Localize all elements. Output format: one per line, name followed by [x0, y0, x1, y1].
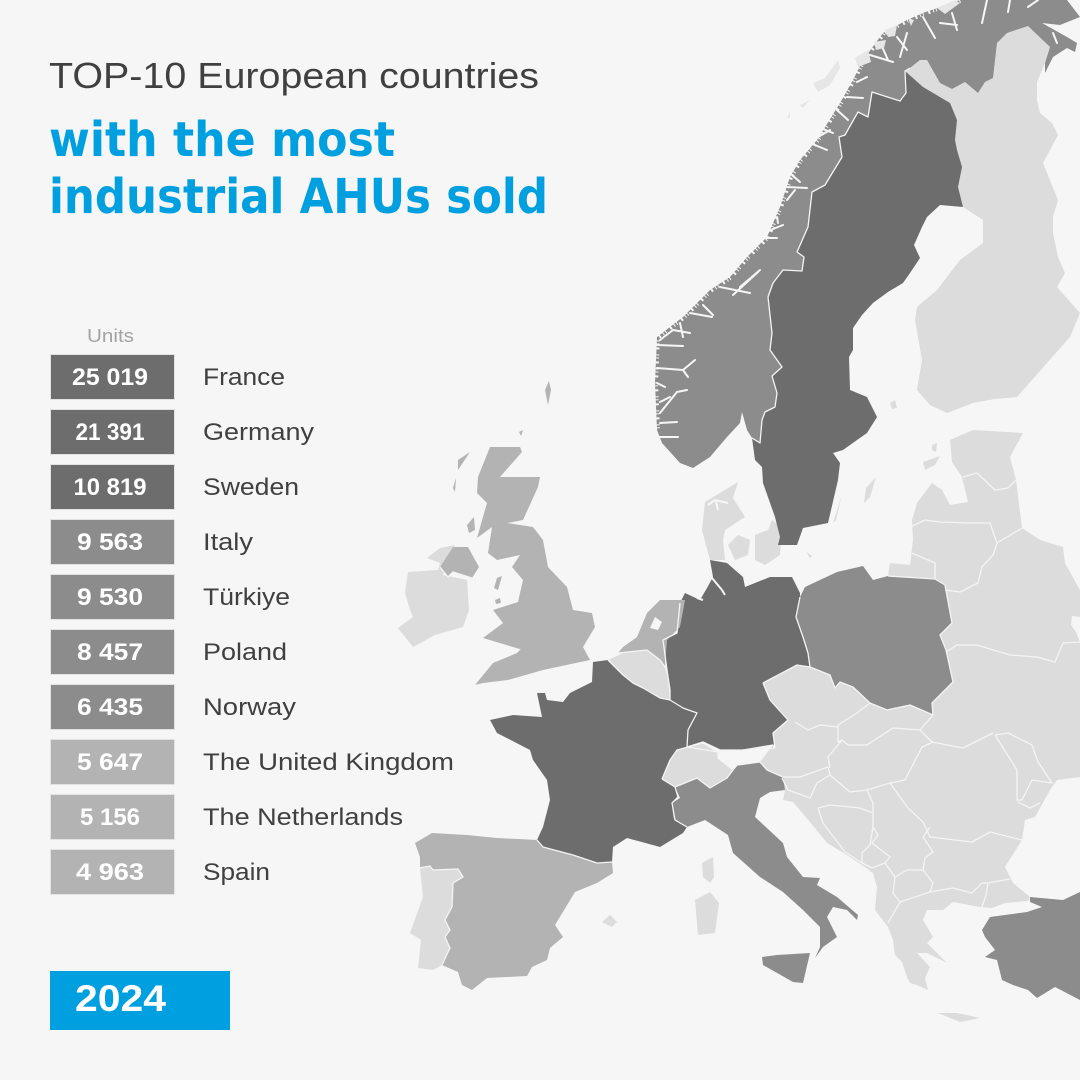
row: France: France [203, 364, 285, 391]
heading: industrial AHUs sold [49, 169, 548, 225]
Limfjord [708, 500, 728, 510]
row: The Netherlands: The Netherlands [203, 804, 403, 831]
country: Italy [672, 762, 858, 983]
land borders [420, 68, 1080, 965]
country: Switzerland [662, 743, 733, 788]
row: Italy: Italy [203, 529, 253, 556]
row: Sweden [50, 464, 299, 510]
country: Norway [655, 0, 1080, 468]
row: France [50, 354, 285, 400]
Balearic islands [602, 915, 617, 927]
country: eastern Europe, unranked [760, 430, 1080, 990]
row: Italy [50, 520, 253, 564]
row: Türkiye: 9 530 [77, 584, 143, 611]
row: Poland: Poland [203, 639, 287, 666]
row: Spain: 4 963 [76, 859, 144, 886]
row: Sweden: Sweden [203, 474, 299, 501]
country: Belgium [608, 650, 670, 700]
year badge: 2024 [75, 978, 166, 1019]
country: France [490, 660, 697, 863]
row: The United Kingdom: The United Kingdom [203, 749, 454, 776]
column label: Units: Units [87, 326, 134, 346]
row: The United Kingdom: 5 647 [77, 749, 143, 776]
ranking table [50, 354, 454, 894]
notch east of Belarus [1071, 616, 1080, 642]
row: Türkiye: Türkiye [203, 584, 290, 611]
row: Poland [50, 630, 287, 674]
heading: with the most [49, 112, 395, 168]
country: Poland [796, 566, 953, 715]
row: Norway [50, 684, 296, 730]
row: The United Kingdom [50, 740, 454, 784]
islands: Corsica, Sardinia and Crete [695, 857, 980, 1022]
country: the United Kingdom [440, 381, 595, 685]
Norwegian fjords [657, 0, 1057, 437]
row: Italy: 9 563 [77, 529, 143, 556]
country: Ireland [398, 545, 469, 647]
row: Norway: Norway [203, 694, 296, 721]
country: Sweden [752, 71, 963, 545]
row: Germany: 21 391 [76, 419, 144, 446]
row: Spain [50, 850, 270, 894]
country: Spain [415, 833, 613, 990]
country: Germany [663, 560, 810, 750]
heading [49, 112, 548, 225]
row: The Netherlands [50, 794, 403, 840]
row: Germany [50, 410, 314, 454]
Norwegian islands [787, 0, 960, 118]
row: France: 25 019 [72, 364, 148, 391]
country: Finland [905, 26, 1080, 413]
row: The Netherlands: 5 156 [80, 804, 140, 831]
row: Germany: Germany [203, 419, 314, 446]
country: Portugal [410, 866, 463, 970]
country: Denmark [702, 482, 782, 565]
title line: TOP-10 European countries [49, 55, 539, 96]
row: Türkiye [50, 574, 290, 620]
country: Turkey [982, 892, 1080, 1000]
year badge [50, 971, 230, 1030]
row: Spain: Spain [203, 859, 270, 886]
map of Europe [398, 0, 1080, 1022]
row: Sweden: 10 819 [74, 474, 146, 501]
coast fringe of Norway [655, 0, 960, 430]
Baltic islands [806, 400, 940, 558]
row: Norway: 6 435 [77, 694, 143, 721]
German North Sea inlets [697, 578, 725, 600]
country: the Netherlands [618, 600, 685, 667]
row: Poland: 8 457 [77, 639, 143, 666]
